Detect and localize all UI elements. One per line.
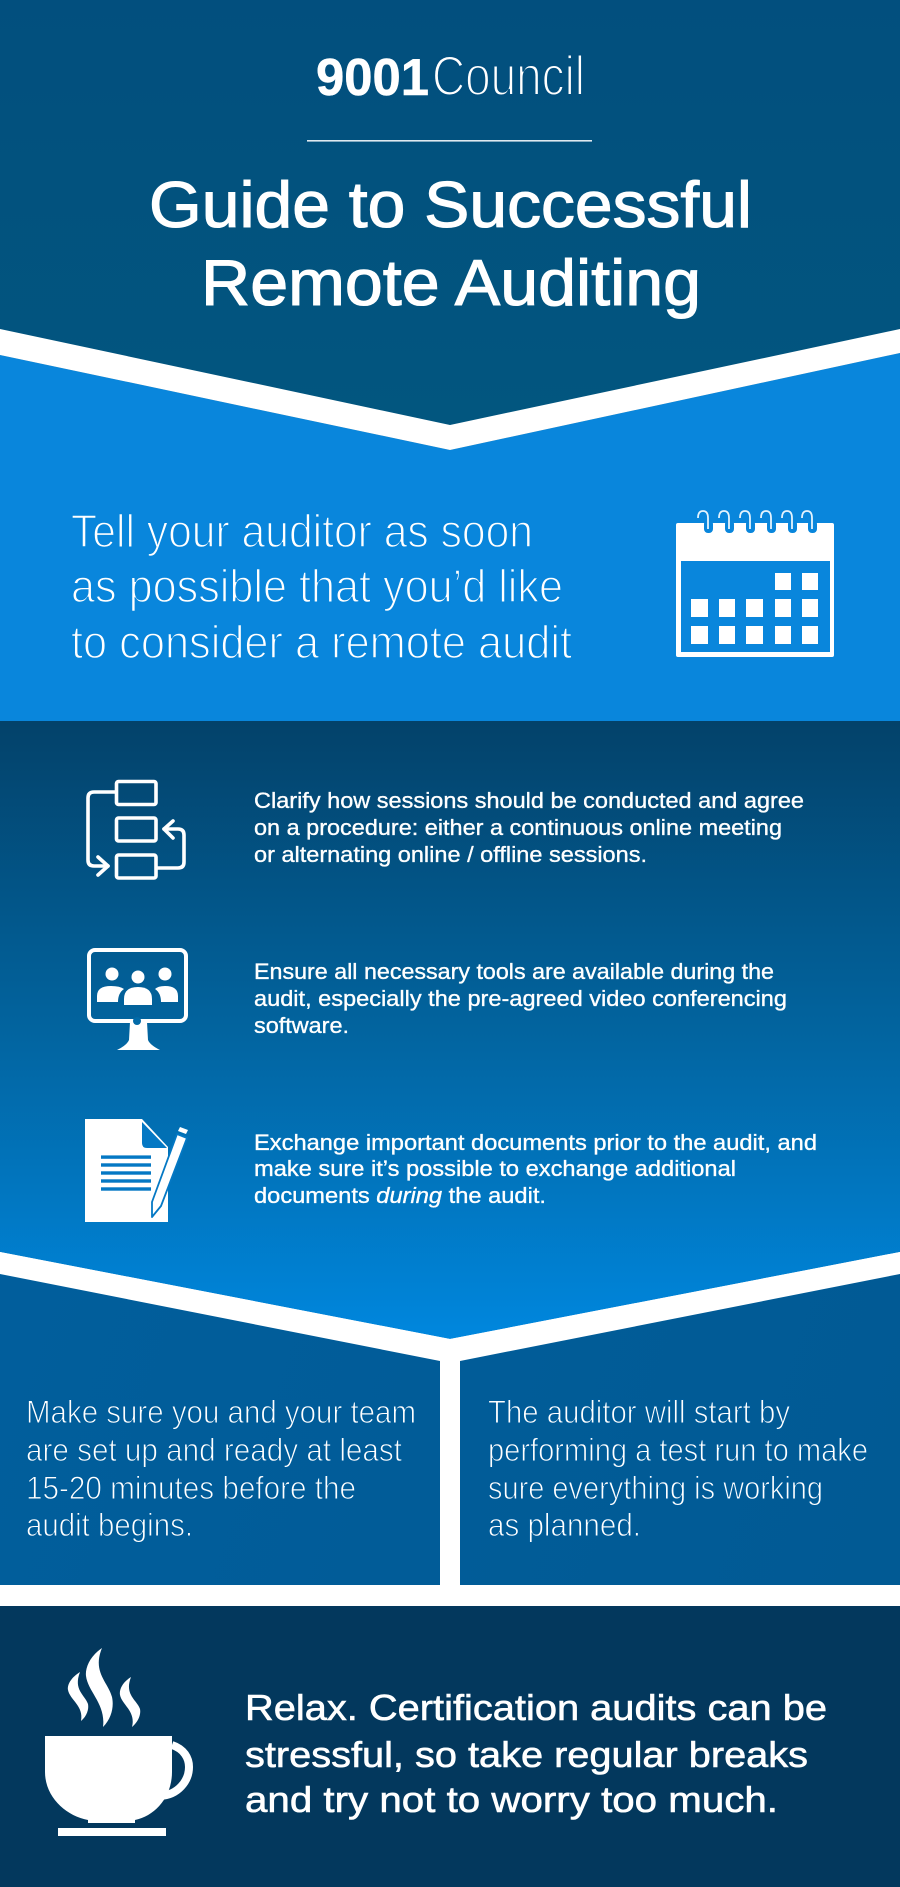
- step text: tools: software.: [254, 1013, 349, 1038]
- panel: header: [0, 0, 900, 450]
- panel: get ready: Make sure you and your team: [26, 1394, 416, 1430]
- closing text: stressful, so take regular breaks: [245, 1734, 808, 1775]
- step text: tools: Ensure all necessary tools are available during the: [254, 959, 774, 984]
- icon: document and pencil: [85, 1119, 188, 1222]
- heading text: [71, 505, 572, 668]
- panel: test run: as planned.: [488, 1507, 641, 1543]
- step text: tools: [254, 959, 787, 1038]
- panel: get ready: 15-20 minutes before the: [26, 1470, 356, 1506]
- panel: test run: The auditor will start by: [488, 1394, 790, 1430]
- panel: test run: sure everything is working: [488, 1470, 823, 1506]
- chevron band and divider: [0, 1252, 900, 1606]
- panel: preparation steps: [0, 721, 900, 1339]
- panel: test run: performing a test run to make: [488, 1432, 868, 1468]
- step text: sessions: on a procedure: either a continuous online meeting: [254, 815, 782, 840]
- step text: documents: make sure it’s possible to exchange additional: [254, 1156, 736, 1181]
- heading text: to consider a remote audit: [71, 616, 572, 668]
- step text: tools: audit, especially the pre-agreed video conferencing: [254, 986, 787, 1011]
- icon: flow chart: [88, 782, 184, 878]
- heading text: Tell your auditor as soon: [71, 505, 533, 557]
- logo: Council: [432, 44, 585, 107]
- logo: 9001: [316, 49, 429, 107]
- heading text: as possible that you’d like: [71, 560, 563, 612]
- icon: coffee cup: [45, 1648, 189, 1836]
- closing text: Relax. Certification audits can be: [245, 1687, 827, 1728]
- step text: documents: [254, 1130, 817, 1208]
- panel: get ready: are set up and ready at least: [26, 1432, 402, 1468]
- panel: tell your auditor: [0, 353, 900, 721]
- step text: sessions: [254, 788, 804, 867]
- step text: documents: documents during the audit.: [254, 1183, 546, 1208]
- icon: calendar: [676, 511, 834, 657]
- step text: sessions: Clarify how sessions should be conducted and agree: [254, 788, 804, 813]
- step text: sessions: or alternating online / offline sessions.: [254, 842, 647, 867]
- title: Remote Auditing: [201, 246, 701, 319]
- closing text: and try not to worry too much.: [245, 1779, 778, 1820]
- panel: relax: [0, 1606, 900, 1887]
- icon: video conference monitor: [89, 950, 186, 1050]
- title: Guide to Successful: [149, 168, 752, 241]
- chevron band: top: [0, 329, 900, 450]
- title: [149, 168, 752, 319]
- step text: documents: Exchange important documents prior to the audit, and: [254, 1130, 817, 1155]
- logo: [316, 44, 585, 107]
- panel: get ready: [0, 1274, 440, 1585]
- closing text: [245, 1687, 827, 1820]
- panel: test run: [460, 1274, 900, 1585]
- panel: get ready: audit begins.: [26, 1507, 193, 1543]
